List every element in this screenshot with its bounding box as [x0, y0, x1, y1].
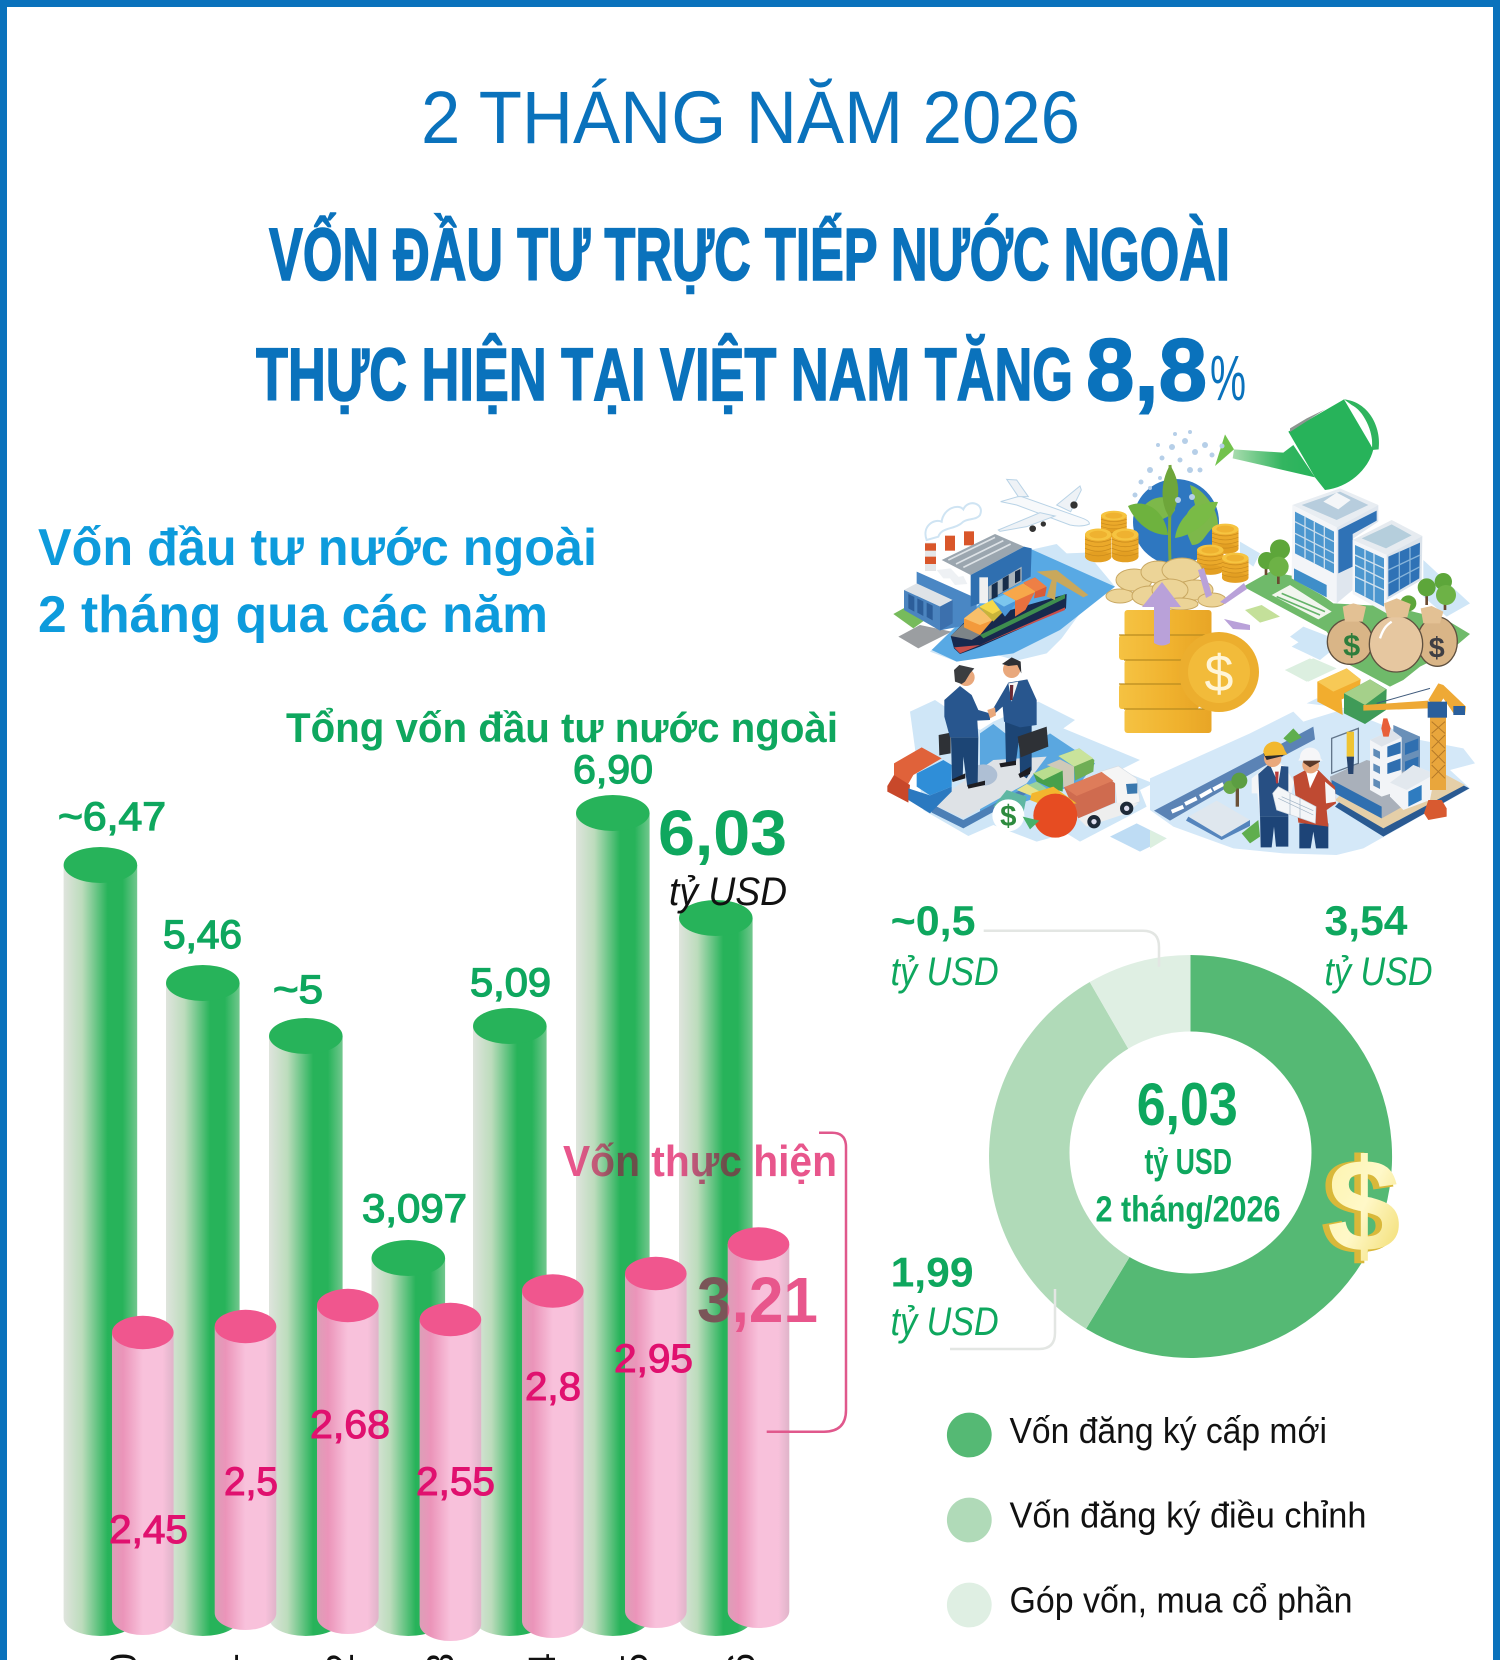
icon: gold dollar: $	[1327, 1132, 1401, 1279]
plane	[1001, 496, 1089, 526]
title line: period: 2 THÁNG NĂM 2026	[421, 76, 1080, 159]
label: ~0,5: tỷ USD	[891, 950, 999, 994]
containers	[894, 747, 942, 787]
section heading: foreign investment over the years: Vốn đầu tư nước ngoài	[38, 519, 597, 577]
pink value labels	[109, 1337, 693, 1552]
donut chart: capital structure	[891, 897, 1432, 1358]
illustration: engineers and construction site	[1150, 658, 1475, 855]
donut centre text: tỷ USD	[1144, 1141, 1232, 1182]
series label: total investment: Tổng vốn đầu tư nước ngoài	[286, 704, 838, 751]
title line: headline 2: THỰC HIỆN TẠI VIỆT NAM TĂNG	[256, 333, 1073, 416]
man left	[939, 665, 990, 789]
segment: new registration 3.54	[1086, 955, 1392, 1358]
green value labels	[58, 748, 653, 1231]
highlighted total 2026: 6,03	[658, 797, 787, 869]
illustration: factory, ship and plane	[893, 479, 1115, 662]
engineer right	[1293, 748, 1336, 848]
engineer left	[1252, 742, 1294, 847]
legend item: capital contribution: Góp vốn, mua cổ phần	[1010, 1580, 1352, 1621]
illustration: business handshake and trade goods	[887, 657, 1167, 852]
series: disbursed capital (pink columns)	[112, 1227, 789, 1641]
bar chart: foreign investment 2 months per year	[58, 704, 846, 1660]
label: 1,99: 1,99	[891, 1249, 974, 1296]
ship	[951, 594, 1067, 654]
pink value labels: 2,55	[416, 1460, 495, 1504]
title line: headline 2: %	[1210, 342, 1246, 414]
trees	[1266, 563, 1445, 610]
pink value labels: 2,95	[614, 1337, 693, 1381]
illustration: business handshake and trade goods: $	[1000, 800, 1016, 833]
building	[1335, 777, 1469, 837]
segment: capital contribution 0.5	[1090, 955, 1190, 1156]
green and yellow boxes	[1317, 668, 1361, 715]
illustration: foreign investment collage	[887, 399, 1475, 855]
money bags	[1327, 598, 1457, 672]
money bags: $	[1429, 632, 1445, 664]
highlighted total 2026	[658, 797, 787, 914]
office towers	[1292, 488, 1378, 527]
green value labels: 3,097	[362, 1187, 467, 1231]
title line: headline 2: 8,8	[1086, 320, 1207, 419]
highlighted total 2026: tỷ USD	[669, 870, 787, 914]
illustration: big coin stack with dollar and up arrow	[1119, 568, 1259, 733]
label: ~0,5	[891, 897, 999, 994]
icon: gold dollar: $	[1322, 1133, 1396, 1280]
legend item: adjustment: Vốn đăng ký điều chỉnh	[1010, 1495, 1366, 1536]
section heading: foreign investment over the years	[38, 519, 597, 644]
green watering can	[1215, 399, 1379, 490]
legend item: new registration	[947, 1410, 1327, 1457]
donut centre text	[1096, 1071, 1280, 1230]
pink value labels: 2,45	[109, 1508, 188, 1552]
pink value labels: 2,8	[525, 1365, 581, 1409]
green value labels: ~6,47	[58, 795, 166, 839]
year axis labels	[103, 1653, 763, 1660]
label: 1,99	[891, 1249, 999, 1344]
man right	[987, 657, 1048, 778]
title block	[256, 76, 1246, 419]
legend item: new registration: Vốn đăng ký cấp mới	[1010, 1410, 1327, 1451]
smoke	[925, 503, 981, 540]
green value labels: ~5	[273, 968, 323, 1012]
legend item: capital contribution	[947, 1580, 1352, 1627]
label: 3,54	[1324, 897, 1432, 994]
tree	[1232, 785, 1242, 807]
donut centre text: 6,03	[1137, 1071, 1238, 1138]
illustration: watering can, offices and money bags	[1215, 399, 1470, 687]
water droplets	[1132, 430, 1224, 503]
label: 1,99: tỷ USD	[891, 1300, 999, 1344]
road	[1154, 727, 1315, 821]
green value labels: 5,46	[163, 913, 242, 957]
boxes and truck	[1033, 765, 1063, 792]
leader lines	[950, 931, 1159, 1349]
green value labels: 5,09	[470, 961, 551, 1005]
section heading: foreign investment over the years: 2 tháng qua các năm	[38, 586, 548, 644]
illustration: coin stacks and pile	[1085, 511, 1249, 610]
illustration: globe with seedling	[1128, 430, 1224, 565]
tower crane	[1363, 683, 1466, 820]
up arrow	[1142, 582, 1181, 646]
money bags: $	[1343, 628, 1360, 662]
segment: adjusted 1.99	[989, 982, 1190, 1329]
label: 3,54: 3,54	[1324, 897, 1408, 944]
legend	[947, 1410, 1366, 1627]
illustration: big coin stack with dollar and up arrow: $	[1205, 645, 1234, 703]
series: total registered capital (green columns)	[64, 795, 753, 1636]
green value labels: 6,90	[573, 748, 653, 792]
label: ~0,5: ~0,5	[891, 897, 976, 944]
highlighted disbursed 2026: 3,21	[697, 1264, 818, 1336]
pink value labels: 2,68	[310, 1403, 390, 1447]
donut centre text: 2 tháng/2026	[1096, 1189, 1280, 1230]
pink value labels: 2,5	[224, 1460, 278, 1504]
series label: disbursed capital: Vốn thực hiện	[563, 1137, 837, 1186]
blueprint	[1273, 787, 1316, 823]
label: 3,54: tỷ USD	[1324, 950, 1432, 994]
bracket	[767, 1133, 846, 1432]
donut hole	[1070, 1032, 1312, 1274]
